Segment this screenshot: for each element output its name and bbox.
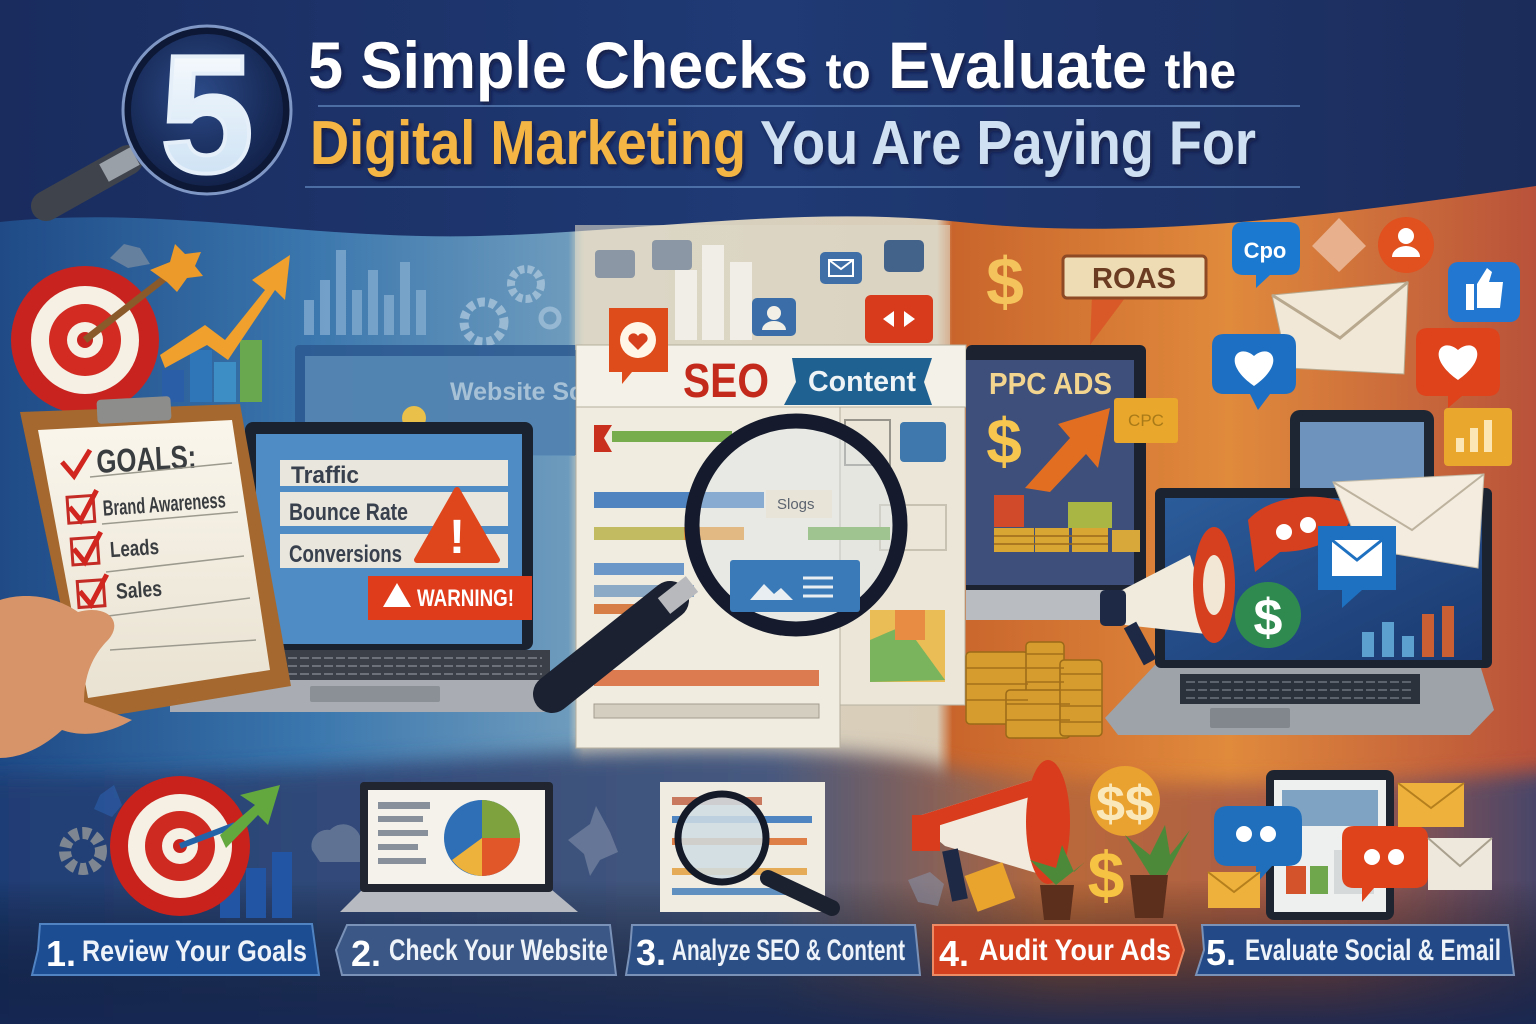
- panel: ROAS sign and dollar: $: [986, 244, 1024, 320]
- step 5 icon: tablet and chat bubbles: [1208, 770, 1492, 920]
- label: step 1: 1.: [46, 933, 76, 974]
- checklist item: leads: [71, 528, 160, 565]
- icon: red speech bubble: [1248, 497, 1352, 572]
- text: bounce rate: Bounce Rate: [289, 499, 408, 526]
- faded background shapes in the bottom band: [94, 785, 944, 906]
- label: step 4: 4.: [939, 933, 969, 974]
- icon: top envelope: [1272, 282, 1408, 374]
- icon: envelope large on laptop: [1333, 474, 1484, 568]
- icon: yellow chart card: [1444, 408, 1512, 466]
- checklist item: brand awareness: Brand Awareness: [102, 487, 226, 521]
- icon: target with growth arrow: [11, 244, 290, 414]
- text: SEO heading: SEO: [683, 355, 769, 408]
- icon: gold coin stacks: [966, 642, 1102, 738]
- icon: location tag: [609, 308, 668, 384]
- bubble: blue chat: [1214, 806, 1302, 884]
- text: conversions: Conversions: [289, 541, 402, 568]
- label: step 5: [1196, 925, 1514, 975]
- step 4 icon: megaphone with money: [912, 760, 1190, 920]
- envelope: white right: [1428, 838, 1492, 890]
- icon: CPC tag: [1114, 398, 1178, 443]
- label: step 4: Audit Your Ads: [979, 934, 1171, 967]
- checklist item: sales: [77, 571, 163, 608]
- icon: green dollar coin: [1235, 582, 1301, 648]
- icon: megaphone: [1100, 527, 1235, 662]
- laptop: social and email: [1105, 410, 1494, 735]
- panel: SEO content background icons: [575, 225, 950, 350]
- title line 2: Digital Marketing You Are Paying For: [310, 109, 1256, 178]
- icon: profile badge: [1378, 217, 1434, 273]
- warning banner: [368, 576, 532, 620]
- icon: heart bubble red: [1416, 328, 1500, 408]
- step 4 icon: megaphone with money: $: [1088, 838, 1124, 912]
- text: goals heading: GOALS:: [95, 438, 197, 480]
- background: middle colour band: [0, 186, 1536, 820]
- label: step 2: Check Your Website: [389, 934, 608, 967]
- panel: SEO document: [576, 308, 966, 748]
- panel: goals background chart: [304, 250, 559, 342]
- laptop: traffic and bounce rate: [170, 422, 585, 712]
- icon: diamond: [1312, 218, 1366, 272]
- laptop: website faded back panel: Website Sco: [450, 378, 598, 406]
- title magnifier icon: number 5: [46, 20, 291, 208]
- panel: back page documents: [840, 405, 965, 705]
- step 1 icon: target with gears: [65, 776, 292, 918]
- tag: content: Content: [808, 366, 916, 398]
- label: step 5: 5.: [1206, 932, 1236, 973]
- icon: warning triangle: !: [449, 511, 465, 564]
- icon: CPC blue bubble: [1232, 222, 1300, 288]
- tag: content: [784, 358, 932, 405]
- label: step 3: 3.: [636, 932, 666, 973]
- background: bottom step band: [0, 749, 1536, 1024]
- icon: faded grey shape top left: [110, 244, 150, 268]
- icon: large magnifying glass: [552, 421, 900, 694]
- background: bottom shade: [0, 880, 1536, 1024]
- title line 1: 5 Simple Checks to Evaluate the: [308, 28, 1236, 102]
- label: step 2: 2.: [351, 933, 381, 974]
- label: step 1: Review Your Goals: [82, 935, 307, 968]
- icon: CPC blue bubble: Cpo: [1244, 238, 1286, 263]
- label: step 4: [933, 925, 1184, 975]
- warning banner: WARNING!: [417, 585, 514, 612]
- icon: thumbs up: [1448, 262, 1520, 322]
- label: step 3: [626, 925, 920, 975]
- icon: hand holding clipboard: [0, 596, 132, 758]
- icon: heart bubble blue: [1212, 334, 1296, 410]
- checklist item: brand awareness: [67, 481, 226, 523]
- panel: ROAS sign and dollar: [986, 244, 1206, 345]
- icon: CPC tag: CPC: [1128, 411, 1164, 430]
- label: step 2: [336, 925, 616, 975]
- clipboard: goals checklist: [20, 396, 291, 720]
- panel: ROAS sign and dollar: ROAS: [1092, 263, 1176, 295]
- envelope: yellow left: [1208, 872, 1260, 908]
- title magnifier icon: number 5: 5: [160, 20, 254, 208]
- label: step 1: [32, 924, 319, 975]
- step 3 icon: magnified report: [660, 782, 832, 912]
- step 2 icon: laptop pie chart: [340, 782, 578, 912]
- bubble: red chat: [1342, 826, 1428, 902]
- laptop: PPC ads: [966, 345, 1146, 620]
- text: slogs: Slogs: [777, 496, 815, 513]
- envelope: yellow top: [1398, 783, 1464, 827]
- step 4 icon: megaphone with money: $$: [1096, 776, 1154, 832]
- icon: warning triangle: [417, 490, 497, 564]
- icon: green dollar coin: $: [1254, 589, 1283, 647]
- laptop: PPC ads: $: [986, 405, 1022, 477]
- label: step 3: Analyze SEO & Content: [672, 934, 905, 967]
- text: PPC ADS: PPC ADS: [989, 366, 1112, 401]
- text: traffic: Traffic: [291, 462, 359, 489]
- checklist item: sales: Sales: [115, 576, 163, 604]
- laptop: website faded back panel: [295, 345, 598, 456]
- checklist item: leads: Leads: [109, 534, 160, 562]
- icon: blue mail bubble: [1318, 526, 1396, 608]
